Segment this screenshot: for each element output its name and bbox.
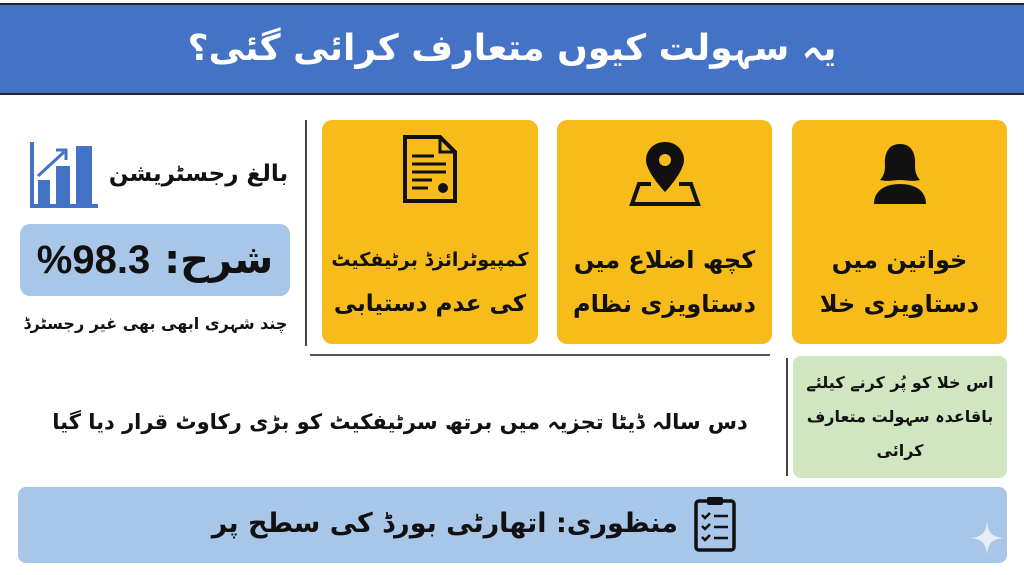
icon: bar chart — [30, 142, 98, 208]
header — [0, 3, 1024, 95]
card: women — [792, 120, 1007, 344]
icon: woman — [874, 144, 926, 204]
title: یہ سہولت کیوں متعارف کرائی گئی؟ — [188, 28, 836, 69]
panel: approval — [18, 487, 1007, 563]
card: certificate — [322, 120, 538, 344]
icon: clipboard — [694, 497, 736, 552]
icon: map pin — [629, 142, 701, 206]
text: خواتین میں — [832, 246, 967, 274]
text — [820, 246, 979, 318]
heading: بالغ رجسٹریشن — [109, 161, 288, 187]
callout: green: کرائی — [877, 441, 923, 460]
text — [573, 246, 756, 318]
rate box — [20, 224, 290, 296]
callout: green: باقاعدہ سہولت متعارف — [807, 407, 993, 426]
text: data analysis: دس سالہ ڈیٹا تجزیہ میں برتھ سرٹیفکیٹ کو بڑی رکاوٹ قرار دیا گیا — [52, 410, 748, 434]
note: چند شہری ابھی بھی غیر رجسٹرڈ — [24, 314, 287, 333]
icon: sparkle — [970, 522, 1004, 554]
callout: green: اس خلا کو پُر کرنے کیلئے — [806, 373, 994, 392]
text: دستاویزی خلا — [820, 290, 979, 318]
callout: green — [793, 356, 1007, 478]
panel: adult registration — [20, 142, 290, 334]
rate box: شرح: %98.3 — [37, 237, 273, 283]
text: دستاویزی نظام — [573, 290, 756, 318]
text: کچھ اضلاع میں — [574, 246, 755, 274]
text: کی عدم دستیابی — [334, 291, 526, 317]
text: منظوری: اتھارٹی بورڈ کی سطح پر — [212, 508, 678, 539]
card: districts — [557, 120, 772, 344]
text — [331, 249, 529, 317]
text: کمپیوٹرائزڈ برٹیفکیٹ — [331, 249, 529, 271]
icon: document — [403, 135, 457, 203]
